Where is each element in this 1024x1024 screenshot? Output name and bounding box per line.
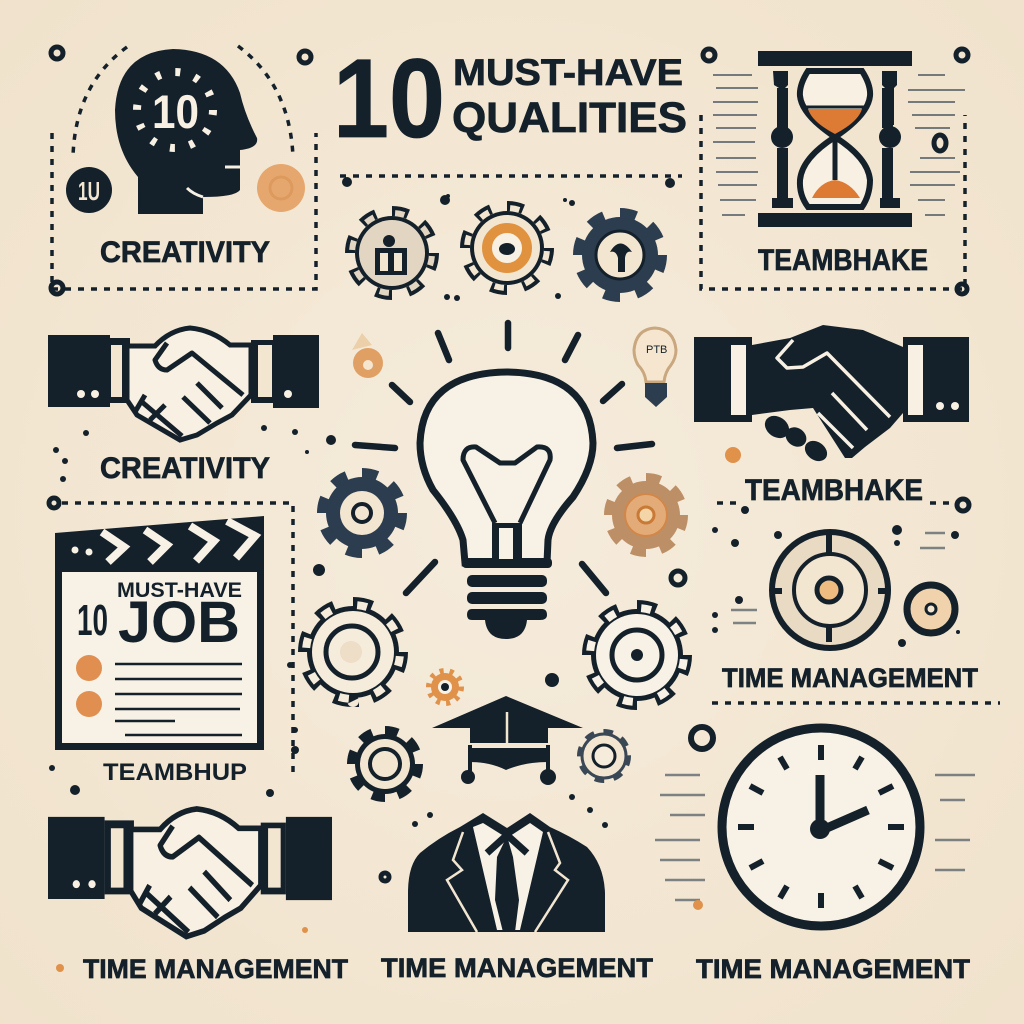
label: creativity top: CREATIVITY: [100, 236, 270, 269]
icon: small orange gear: [429, 671, 461, 703]
label: teambhake top: TEAMBHAKE: [758, 244, 928, 277]
row of three small gears: [350, 206, 662, 297]
icon: central light bulb: [355, 323, 652, 639]
icon: small bulb: PTB: [646, 344, 667, 356]
label: time management right: TIME MANAGEMENT: [722, 663, 978, 693]
icon: gear lower right: [579, 731, 629, 781]
icon: large gear left: [304, 603, 402, 701]
title: MUST-HAVE: [453, 52, 683, 93]
icon: small bulb: [634, 328, 676, 407]
title: [333, 36, 687, 161]
icon: orange coin: [257, 164, 305, 212]
icon: orange sparkle: [352, 333, 383, 378]
icon: handshake left: [48, 328, 319, 440]
icon: business suit: [408, 813, 605, 932]
icon: job clapperboard card: [55, 516, 264, 750]
title: 10: [333, 36, 445, 161]
hatching beside hourglass: [713, 75, 965, 215]
icon: clock: [722, 728, 920, 926]
icon: gear two: [465, 206, 549, 290]
label: time management bottom: [83, 953, 971, 984]
icon: orange gear: [609, 478, 683, 552]
icon: job clapperboard card: JOB: [118, 590, 240, 655]
icon: large gear right: [588, 606, 686, 704]
icon: job clapperboard card: 10: [77, 596, 108, 645]
icon: head with 10: 10: [152, 85, 199, 138]
icon: dark gear left: [322, 473, 402, 553]
icon: small dark badge: 1U: [78, 176, 100, 206]
icon: handshake right: [694, 325, 969, 465]
icon: head with 10: [115, 49, 257, 214]
label: time management bottom: TIME MANAGEMENT: [381, 953, 654, 983]
title: QUALITIES: [452, 94, 687, 142]
icon: hourglass: [758, 51, 912, 227]
icon: target dial: [772, 532, 888, 648]
label: time management bottom: TIME MANAGEMENT: [696, 954, 971, 984]
icon: handshake bottom left: [48, 809, 332, 937]
icon: small dark badge: [66, 167, 112, 213]
label: time management bottom: TIME MANAGEMENT: [83, 954, 349, 984]
icon: gear one: [350, 211, 434, 295]
icon: small target: [907, 585, 955, 633]
label: creativity middle: CREATIVITY: [100, 452, 270, 485]
icon: graduation cap: [432, 696, 583, 785]
icon: gear lower left: [352, 731, 418, 797]
icon: gear three: [578, 213, 662, 297]
icon: job clapperboard card: MUST-HAVE: [117, 579, 242, 602]
label: teambhake middle: TEAMBHAKE: [745, 474, 923, 507]
label: teambhup: TEAMBHUP: [103, 759, 247, 786]
